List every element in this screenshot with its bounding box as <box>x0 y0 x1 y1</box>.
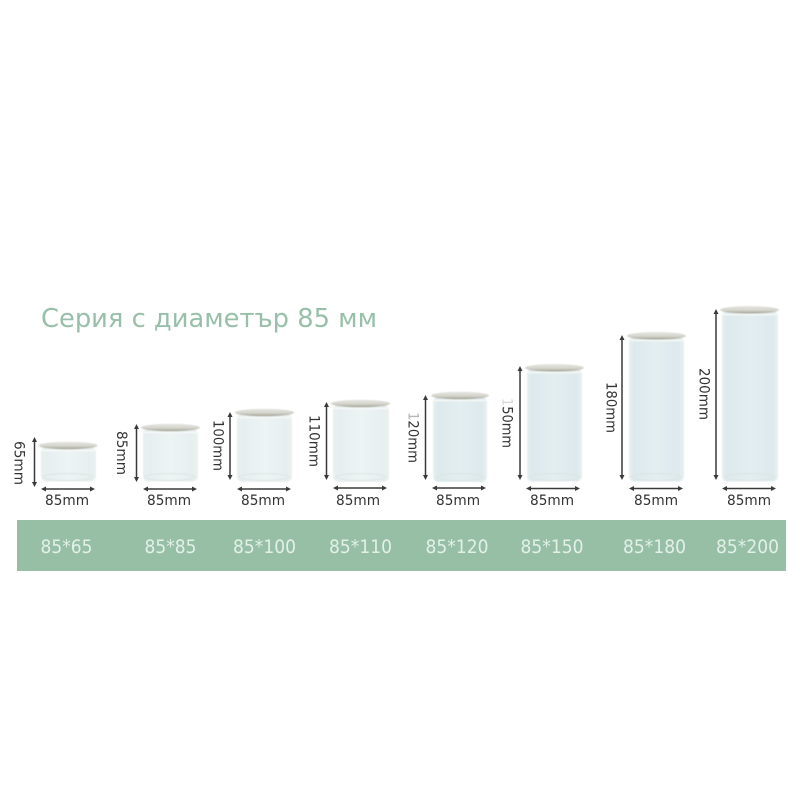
can 85x65 <box>10 437 98 509</box>
can 85x150: 1 50mm <box>498 398 514 448</box>
size label 85*120: 85*120 <box>426 536 488 558</box>
can 85x100: 85mm <box>241 493 285 509</box>
can 85x120: 1 20mm <box>404 412 420 463</box>
title: Серия с диаметър 85 мм <box>41 304 377 334</box>
size label 85*85: 85*85 <box>144 536 196 558</box>
can 85x100 <box>210 409 294 509</box>
can 85x65: 85mm <box>45 493 89 509</box>
can 85x150: 85mm <box>530 493 574 509</box>
can 85x85 <box>113 424 200 509</box>
size label 85*150: 85*150 <box>520 536 584 558</box>
can 85x180: 85mm <box>634 493 678 509</box>
size label 85*200: 85*200 <box>716 536 779 558</box>
can 85x200 <box>696 306 779 509</box>
can 85x85: 85mm <box>147 493 191 509</box>
can 85x200: 85mm <box>727 493 771 509</box>
can 85x150 <box>498 364 584 509</box>
can 85x180: 180mm <box>602 382 618 433</box>
size label 85*100: 85*100 <box>233 536 296 558</box>
can 85x100: 100mm <box>210 420 226 471</box>
size band <box>17 520 786 571</box>
can 85x110 <box>306 400 390 509</box>
can 85x65: 65mm <box>10 441 26 485</box>
can 85x85: 85mm <box>113 431 129 475</box>
size label 85*65: 85*65 <box>40 536 92 558</box>
can 85x110: 110mm <box>306 415 322 467</box>
size label 85*180: 85*180 <box>623 536 686 558</box>
can 85x110: 85mm <box>336 493 380 509</box>
can 85x120: 85mm <box>436 493 480 509</box>
size label 85*110: 85*110 <box>329 536 392 558</box>
can 85x120 <box>404 392 489 509</box>
can 85x180 <box>602 332 686 509</box>
can 85x200: 200mm <box>696 368 712 420</box>
